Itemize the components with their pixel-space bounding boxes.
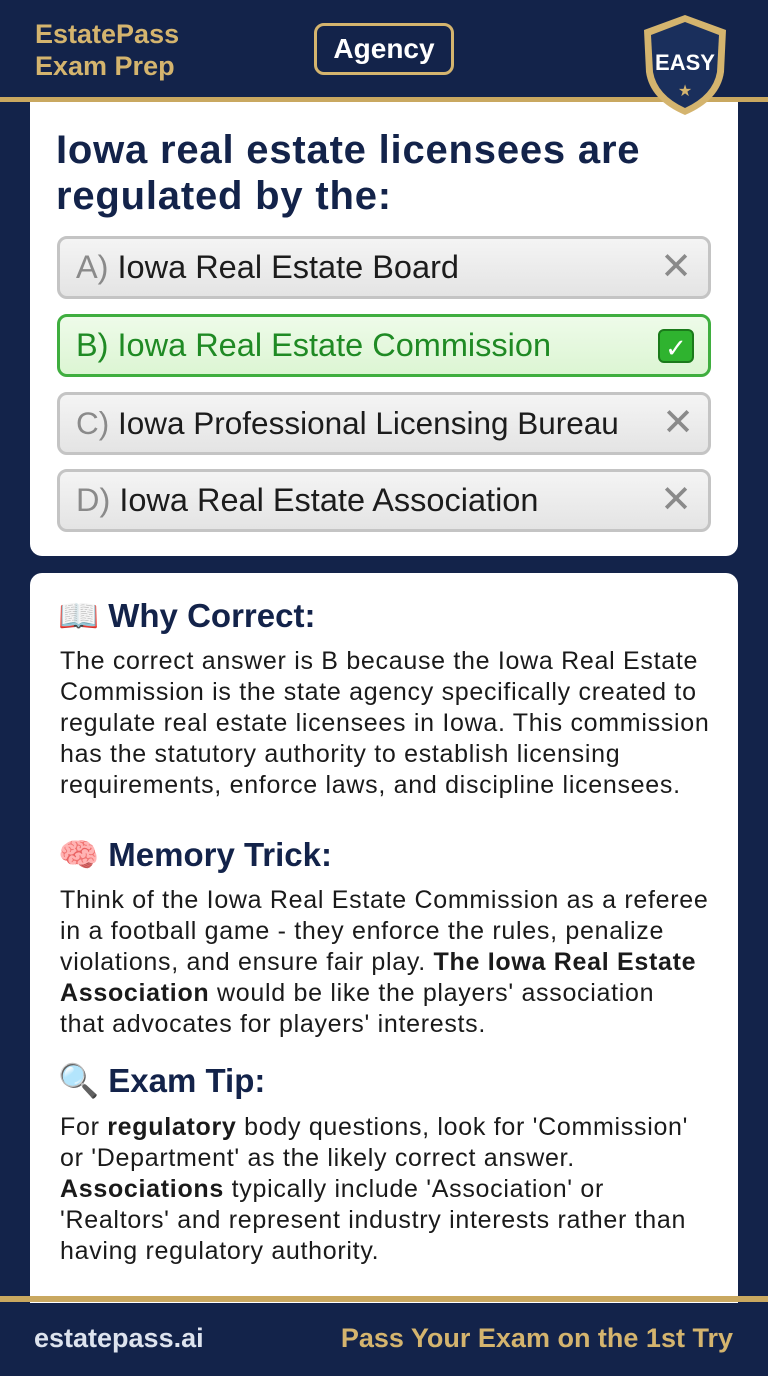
gold line top: [0, 97, 768, 102]
header brand: EstatePass: [35, 19, 179, 49]
tip text: or 'Department' as the likely correct answer.: [60, 1144, 575, 1172]
question title: Iowa real estate licensees are: [56, 128, 640, 172]
option C: ✕: [662, 402, 694, 444]
option D: [57, 469, 711, 532]
question title: regulated by the:: [56, 174, 392, 218]
difficulty badge: ★: [678, 83, 692, 100]
tip text: having regulatory authority.: [60, 1237, 379, 1265]
card: explanation: [30, 573, 738, 1303]
why text: [60, 647, 709, 799]
option D: ✕: [660, 479, 692, 521]
question title: [56, 128, 640, 218]
tip text: 'Realtors' and represent industry interests rather than: [60, 1206, 686, 1234]
category tag: Agency: [333, 33, 435, 64]
footer slogan: Pass Your Exam on the 1st Try: [341, 1323, 733, 1353]
header brand: [35, 19, 179, 81]
option A: A) Iowa Real Estate Board: [76, 249, 459, 285]
option A: [57, 236, 711, 299]
memory text: Think of the Iowa Real Estate Commission as a referee: [60, 886, 708, 914]
why text: The correct answer is B because the Iowa Real Estate: [60, 647, 698, 675]
option C: [57, 392, 711, 455]
header brand: Exam Prep: [35, 51, 175, 81]
tip text: Associations typically include 'Association' or: [60, 1175, 604, 1203]
option A: ✕: [660, 246, 692, 288]
why text: regulate real estate licensees in Iowa. This commission: [60, 709, 709, 737]
tip text: [60, 1113, 688, 1265]
why text: requirements, enforce laws, and discipline licensees.: [60, 771, 681, 799]
option D: D) Iowa Real Estate Association: [76, 482, 538, 518]
option B correct: B) Iowa Real Estate Commission: [76, 327, 551, 363]
why text: Commission is the state agency specifically created to: [60, 678, 697, 706]
memory text: [60, 886, 708, 1038]
memory text: Association would be like the players' association: [60, 979, 654, 1007]
why text: has the statutory authority to establish licensing: [60, 740, 620, 768]
option B correct: ✓: [665, 333, 687, 363]
category tag: [314, 23, 454, 75]
heading why correct: 📖 Why Correct:: [58, 597, 315, 634]
tip text: For regulatory body questions, look for 'Commission': [60, 1113, 688, 1141]
option B correct: [57, 314, 711, 377]
difficulty badge: [644, 15, 726, 115]
memory text: in a football game - they enforce the rules, penalize: [60, 917, 664, 945]
memory text: that advocates for players' interests.: [60, 1010, 486, 1038]
heading exam tip: 🔍 Exam Tip:: [58, 1062, 265, 1099]
gold line bottom: [0, 1296, 768, 1302]
footer url: estatepass.ai: [34, 1323, 204, 1353]
card: question: [30, 102, 738, 556]
memory text: violations, and ensure fair play. The Iowa Real Estate: [60, 948, 696, 976]
difficulty badge: EASY: [655, 50, 715, 75]
option C: C) Iowa Professional Licensing Bureau: [76, 405, 619, 441]
heading memory trick: 🧠 Memory Trick:: [58, 836, 332, 873]
